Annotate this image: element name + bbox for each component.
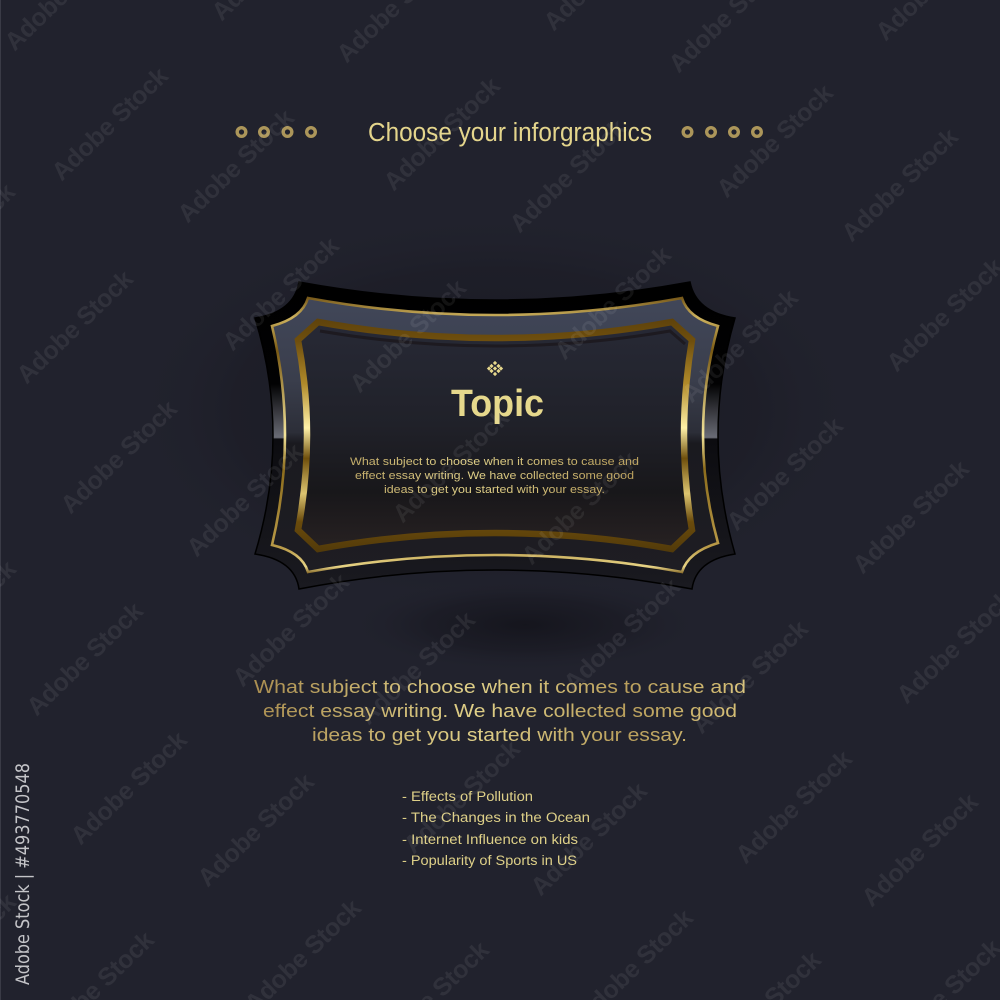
watermarks: Adobe Stock: [711, 79, 839, 203]
badge description: ideas to get you started with your essay.: [384, 484, 605, 496]
watermarks: Adobe Stock: [378, 72, 506, 196]
badge description: What subject to choose when it comes to cause and: [350, 456, 639, 468]
badge description: effect essay writing. We have collected some good: [355, 470, 634, 482]
description paragraph: ideas to get you started with your essay.: [312, 724, 687, 745]
badge shadow glow: [125, 210, 865, 673]
watermarks: Adobe Stock: [516, 446, 644, 570]
watermarks: Adobe Stock: [55, 395, 183, 519]
topic list: - Popularity of Sports in US: [402, 853, 577, 868]
description paragraph: [254, 676, 746, 745]
inner gold frame and panel: [298, 322, 692, 549]
dots: left ornament: [237, 128, 315, 136]
topic list: - Internet Influence on kids: [402, 832, 578, 847]
topic list: - Effects of Pollution: [402, 789, 533, 804]
watermarks: Adobe Stock: [344, 274, 472, 398]
watermarks: Adobe Stock: [398, 735, 526, 859]
watermarks: Adobe Stock: [353, 606, 481, 730]
dots: right ornament: [683, 128, 761, 136]
outer badge shape: [255, 282, 735, 589]
icon: ornament: [487, 361, 503, 376]
badge description: [350, 456, 639, 496]
watermarks: Adobe Stock: [217, 232, 345, 356]
watermarks: Adobe Stock: [11, 265, 139, 389]
badge frame: [255, 282, 735, 589]
watermarks: Adobe Stock: [387, 404, 515, 528]
gold ring and blue fill: [272, 298, 718, 572]
watermarks: Adobe Stock: [676, 284, 804, 408]
watermarks: Adobe Stock: [181, 438, 309, 562]
watermarks: Adobe Stock: [21, 597, 149, 721]
watermarks: Adobe Stock: [730, 745, 858, 869]
watermarks: Adobe Stock: [192, 768, 320, 892]
watermarks: Adobe Stock: [172, 104, 300, 228]
watermarks: Adobe Stock: [46, 62, 174, 186]
topic list: - The Changes in the Ocean: [402, 810, 590, 825]
heading: Choose your inforgraphics: [368, 119, 652, 147]
watermarks: Adobe Stock: [856, 788, 984, 912]
badge title: Topic: [451, 383, 544, 425]
topic list: [402, 789, 590, 868]
watermarks: Adobe Stock: [227, 568, 355, 692]
watermarks: Adobe Stock: [504, 114, 632, 238]
stock id label: Adobe Stock | #493770548: [12, 763, 34, 985]
watermarks: Adobe Stock: [549, 241, 677, 365]
watermarks: Adobe Stock: [836, 123, 964, 247]
inner shadow line: [320, 331, 685, 346]
watermarks: Adobe Stock: [721, 412, 849, 536]
watermarks: Adobe Stock: [65, 726, 193, 850]
watermarks: Adobe Stock: [525, 777, 653, 901]
description paragraph: effect essay writing. We have collected some good: [263, 700, 737, 721]
watermarks: Adobe Stock: [686, 615, 814, 739]
watermarks: Adobe Stock: [847, 455, 975, 579]
watermarks: Adobe Stock: [558, 573, 686, 697]
description paragraph: What subject to choose when it comes to cause and: [254, 676, 746, 697]
